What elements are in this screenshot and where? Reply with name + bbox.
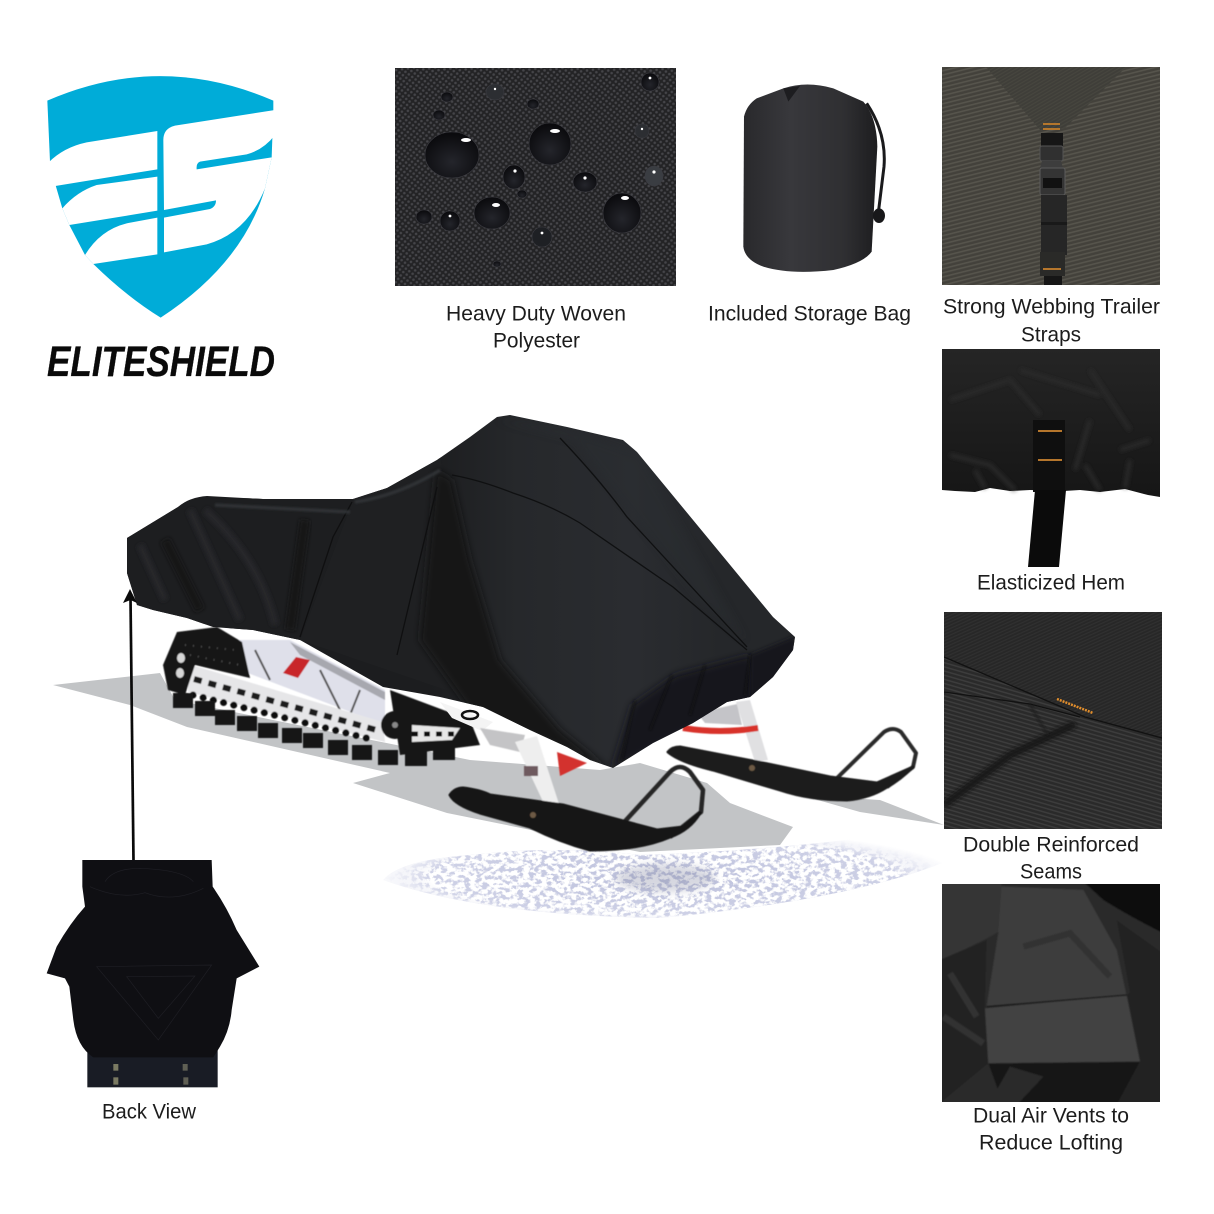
arrow: back view pointer [123,589,137,861]
label: elasticized hem: Elasticized Hem [977,570,1125,594]
bumper decal [440,702,493,731]
label: dual air vents: Dual Air Vents to [973,1104,1129,1128]
photo: elasticized hem [942,349,1160,567]
label: included storage bag: Included Storage Bag [708,302,911,326]
label: dual air vents: Reduce Lofting [979,1130,1123,1154]
logo shield icon [47,76,275,318]
photo: storage bag [743,84,885,272]
photo: back view of cover [47,860,259,1087]
label: trailer straps: Strong Webbing Trailer [943,294,1160,318]
label: heavy duty woven polyester: Polyester [493,328,580,352]
logo wordmark: ELITESHIELD [47,338,275,386]
label: double reinforced seams: Seams [1020,860,1082,884]
label: heavy duty woven polyester [446,302,626,352]
label: dual air vents [973,1104,1129,1154]
rear ski and strut [668,700,916,800]
label: heavy duty woven polyester: Heavy Duty Woven [446,302,626,326]
front ski and strut [450,728,703,850]
main illustration: covered snowmobile [53,415,945,918]
label: double reinforced seams [963,832,1139,884]
logo: EliteShield [47,76,275,386]
snow patch [383,826,945,918]
photo: trailer strap and buckle [942,67,1160,285]
photo: double reinforced seams [944,612,1162,829]
black cover [120,415,796,770]
label: double reinforced seams: Double Reinforced [963,832,1139,856]
photo: dual air vents [940,882,1163,1105]
track and suspension [163,627,480,766]
label: back view: Back View [102,1100,196,1124]
ground shadow [53,673,944,852]
label: trailer straps: Straps [1021,322,1081,346]
photo: woven polyester with water drops [395,68,676,286]
label: trailer straps [943,294,1160,346]
